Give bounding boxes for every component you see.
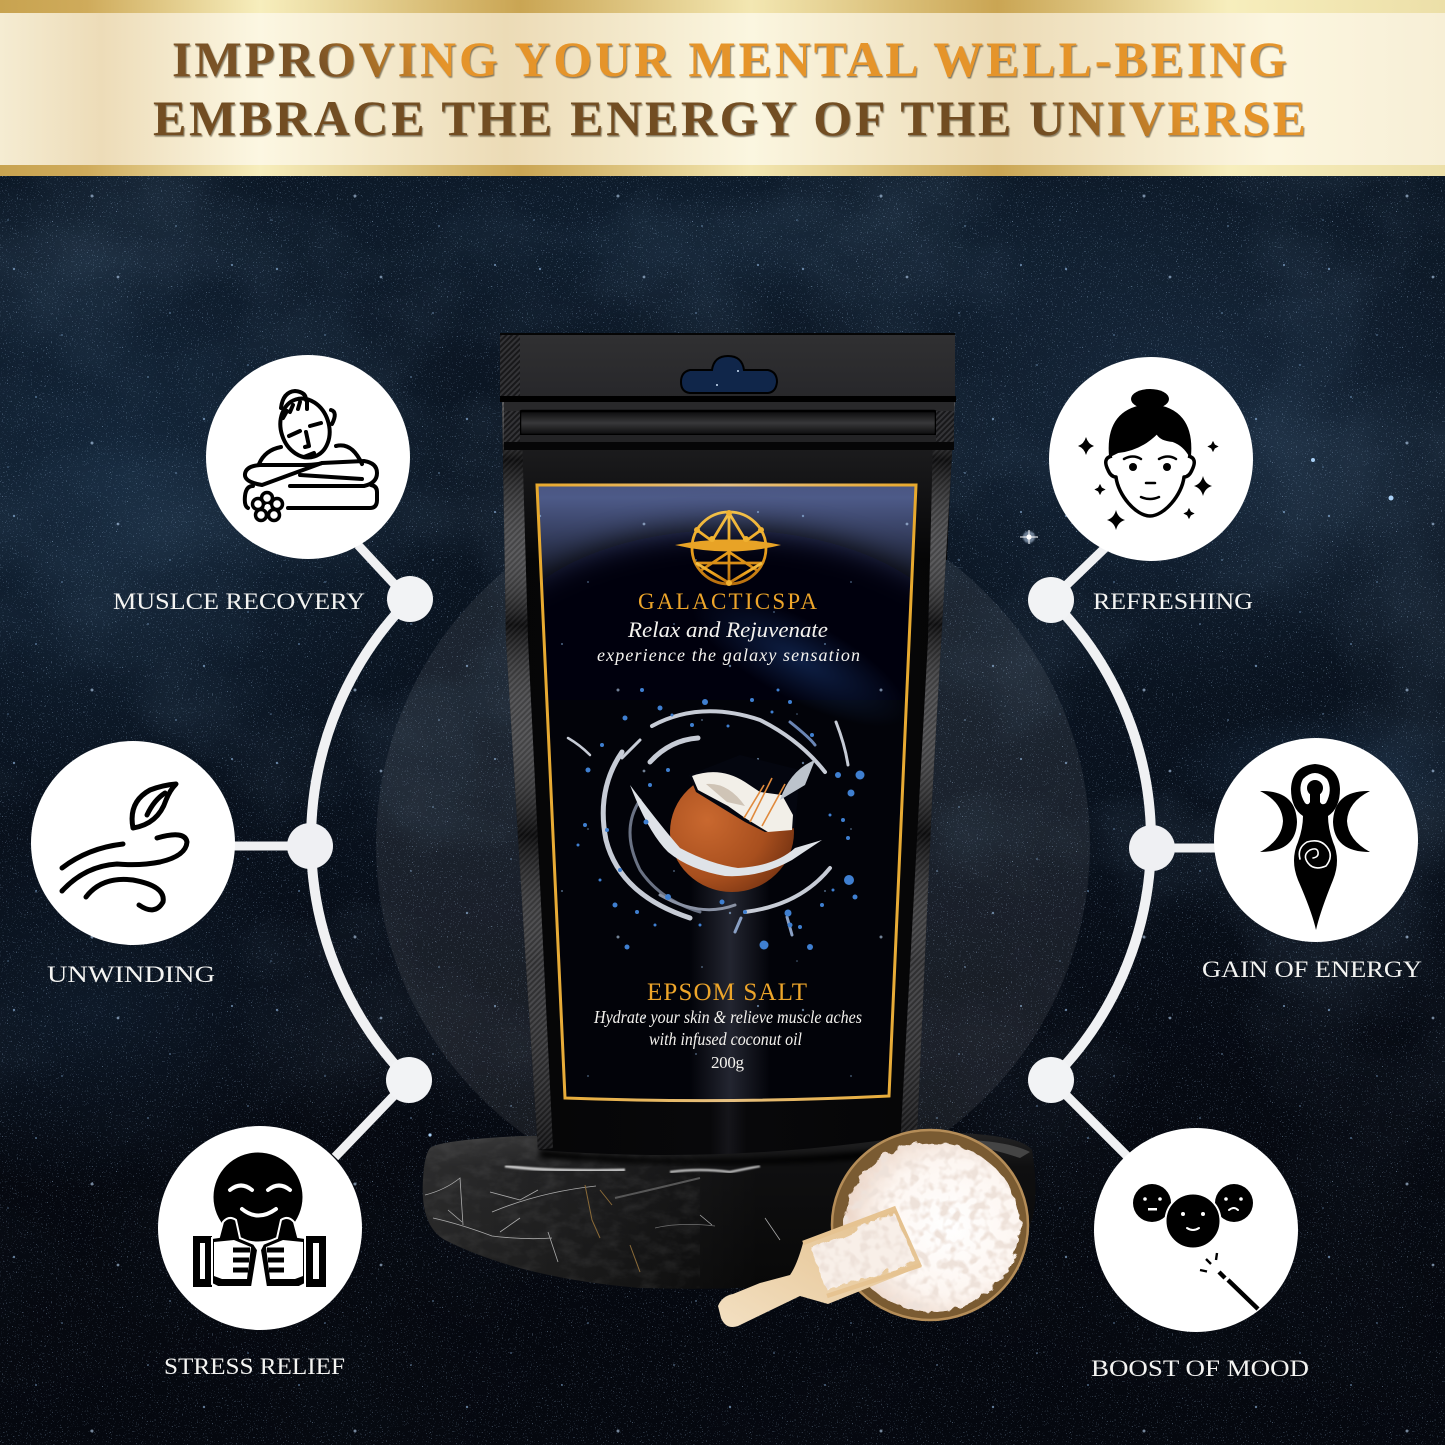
marble stone pedestal (423, 1133, 1036, 1289)
bowl of epsom salt (832, 1130, 1028, 1320)
benefit: boost of mood icon (1094, 1128, 1298, 1332)
product name: EPSOM SALT (647, 979, 807, 1006)
benefit: gain of energy icon (1214, 738, 1418, 942)
label: boost of mood: BOOST OF MOOD (1091, 1356, 1309, 1381)
top seal with hang hole (500, 333, 956, 402)
zipper (504, 402, 954, 450)
water ring (568, 711, 848, 935)
label: gain of energy: GAIN OF ENERGY (1202, 957, 1422, 982)
product pouch (493, 333, 963, 1165)
title: IMPROVING YOUR MENTAL WELL-BEING (172, 31, 1287, 87)
title (153, 31, 1306, 146)
title: EMBRACE THE ENERGY OF THE UNIVERSE (153, 90, 1306, 146)
wooden scoop (718, 1208, 922, 1327)
faint large circle behind product (376, 488, 1090, 1202)
splash foam (630, 785, 822, 876)
tagline: Relax and Rejuvenate (627, 617, 828, 642)
benefit: muscle recovery icon (206, 355, 410, 559)
benefit: refreshing icon (1049, 357, 1253, 561)
label: unwinding: UNWINDING (47, 962, 215, 987)
header banner (0, 0, 1445, 176)
pouch body (502, 400, 955, 1155)
left gusset (502, 400, 553, 1150)
gold framed label (535, 484, 918, 1102)
coconut water splash illustration (568, 688, 864, 950)
droplets (576, 688, 864, 950)
brand name: GALACTICSPA (638, 589, 817, 614)
product description line 2: with infused coconut oil (649, 1029, 802, 1049)
coconut (670, 772, 794, 892)
benefit: unwinding icon (31, 741, 235, 945)
left timeline arc (230, 545, 433, 1157)
product description line 1: Hydrate your skin & relieve muscle aches (593, 1007, 862, 1027)
brand logo: gold globe (675, 510, 781, 586)
label: refreshing: REFRESHING (1093, 589, 1253, 614)
label: stress relief: STRESS RELIEF (164, 1354, 345, 1379)
pouch shadow (540, 1145, 917, 1165)
benefit: stress relief icon (158, 1126, 362, 1330)
right gusset (900, 400, 955, 1148)
sub tagline: experience the galaxy sensation (597, 645, 860, 665)
net weight: 200g (711, 1053, 744, 1072)
label: muscle recovery: MUSLCE RECOVERY (113, 589, 365, 614)
right timeline arc (1028, 546, 1220, 1157)
